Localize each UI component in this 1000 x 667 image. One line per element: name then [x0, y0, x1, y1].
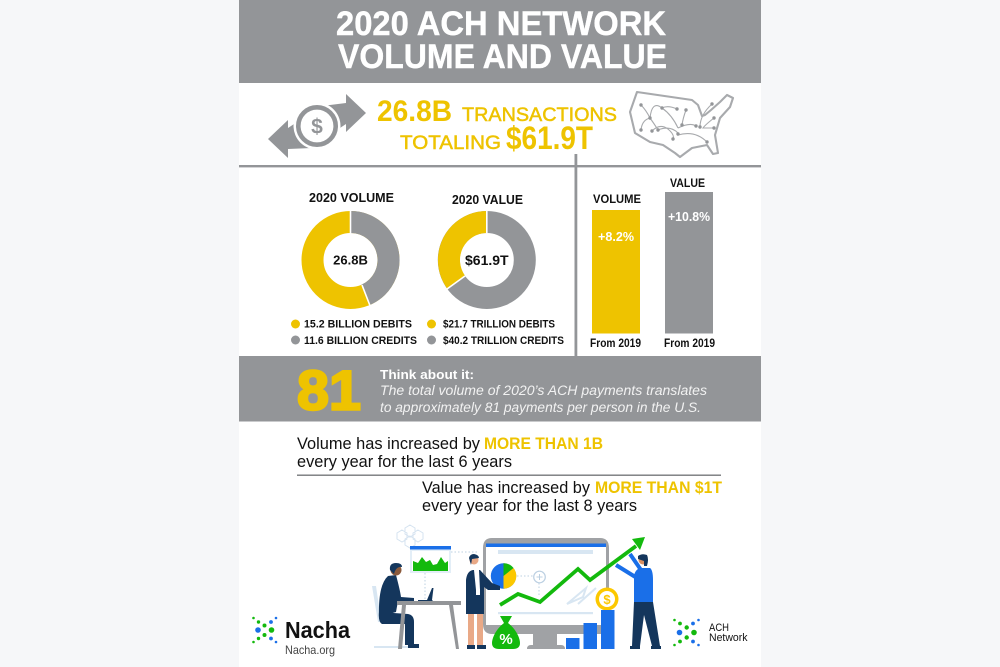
- money bag: [492, 616, 520, 649]
- legend: value debits and credits: $40.2 TRILLION CREDITS: [443, 335, 564, 347]
- logo: Nacha: Nacha.org: [285, 643, 335, 657]
- title banner: [239, 0, 761, 83]
- desk with laptop: [397, 588, 461, 649]
- text: volume increase: Volume has increased by: [297, 435, 481, 453]
- logo: ACH Network: [673, 619, 748, 646]
- bar: value growth: From 2019: [664, 338, 715, 350]
- coin stack: $: [603, 592, 611, 607]
- icon: US network map: [630, 92, 733, 157]
- person: man lifting arrow: [616, 554, 661, 649]
- icon: cube cluster: [397, 525, 423, 548]
- headline: transactions and total: [377, 95, 617, 156]
- callout: think about it: The total volume of 2020’s ACH payments translates: [380, 383, 707, 398]
- pie chart: [491, 563, 516, 589]
- person: seated man: [372, 563, 419, 648]
- callout: think about it: 81: [297, 358, 361, 422]
- legend: value debits and credits: $21.7 TRILLION DEBITS: [443, 318, 555, 330]
- bar: value growth: VALUE: [670, 178, 705, 190]
- panel: 2020 volume donut: [309, 190, 394, 307]
- text: value increase: every year for the last 8 years: [422, 497, 637, 515]
- bar: value growth: +10.8%: [668, 209, 710, 224]
- growth arrow: [500, 537, 645, 605]
- headline: transactions and total: TRANSACTIONS: [462, 105, 617, 126]
- logo: Nacha: Nacha: [285, 617, 350, 643]
- monitor: [483, 538, 609, 649]
- text: value increase: [422, 479, 722, 515]
- legend: volume debits and credits: [291, 318, 417, 347]
- panel: 2020 value donut: [447, 192, 525, 298]
- headline: transactions and total: TOTALING: [400, 133, 501, 154]
- text: volume increase: every year for the last 6 years: [297, 453, 512, 471]
- coin stack: [596, 588, 618, 610]
- text: volume increase: MORE THAN 1B: [484, 435, 603, 453]
- legend: volume debits and credits: 15.2 BILLION DEBITS: [304, 318, 412, 330]
- panel: 2020 volume donut: 2020 VOLUME: [309, 190, 394, 205]
- bars: [566, 610, 614, 649]
- bar: volume growth: [590, 194, 641, 350]
- text: value increase: Value has increased by: [422, 479, 591, 497]
- legend: value debits and credits: [427, 318, 564, 347]
- bar: volume growth: VOLUME: [593, 194, 641, 206]
- callout: think about it: [239, 356, 761, 422]
- panel: 2020 value donut: $61.9T: [465, 252, 509, 268]
- headline: transactions and total: 26.8B: [377, 95, 452, 128]
- bar: volume growth: From 2019: [590, 338, 641, 350]
- icon: money exchange arrows: [268, 94, 366, 158]
- panel: 2020 volume donut: 26.8B: [333, 252, 368, 268]
- icon: money exchange arrows: $: [311, 116, 323, 138]
- legend: volume debits and credits: 11.6 BILLION CREDITS: [304, 335, 417, 347]
- logo: ACH Network: ACH: [709, 622, 729, 634]
- logo: Nacha: [252, 617, 350, 657]
- bar: volume growth: +8.2%: [598, 229, 634, 244]
- chart card: [410, 546, 479, 600]
- panel: 2020 value donut: 2020 VALUE: [452, 192, 523, 207]
- callout: think about it: Think about it:: [380, 367, 474, 382]
- person: woman presenting: [466, 554, 500, 649]
- logo: ACH Network: Network: [709, 632, 748, 644]
- callout: think about it: to approximately 81 payments per person in the U.S.: [380, 400, 701, 415]
- text: value increase: MORE THAN $1T: [595, 479, 722, 497]
- bar: value growth: [664, 178, 715, 350]
- title banner: VOLUME AND VALUE: [338, 38, 667, 76]
- illustration: analysts with growth chart: [372, 525, 661, 649]
- title banner: 2020 ACH NETWORK: [336, 5, 666, 43]
- text: volume increase: [297, 435, 603, 471]
- money bag: %: [499, 631, 513, 648]
- headline: transactions and total: $61.9T: [506, 120, 593, 156]
